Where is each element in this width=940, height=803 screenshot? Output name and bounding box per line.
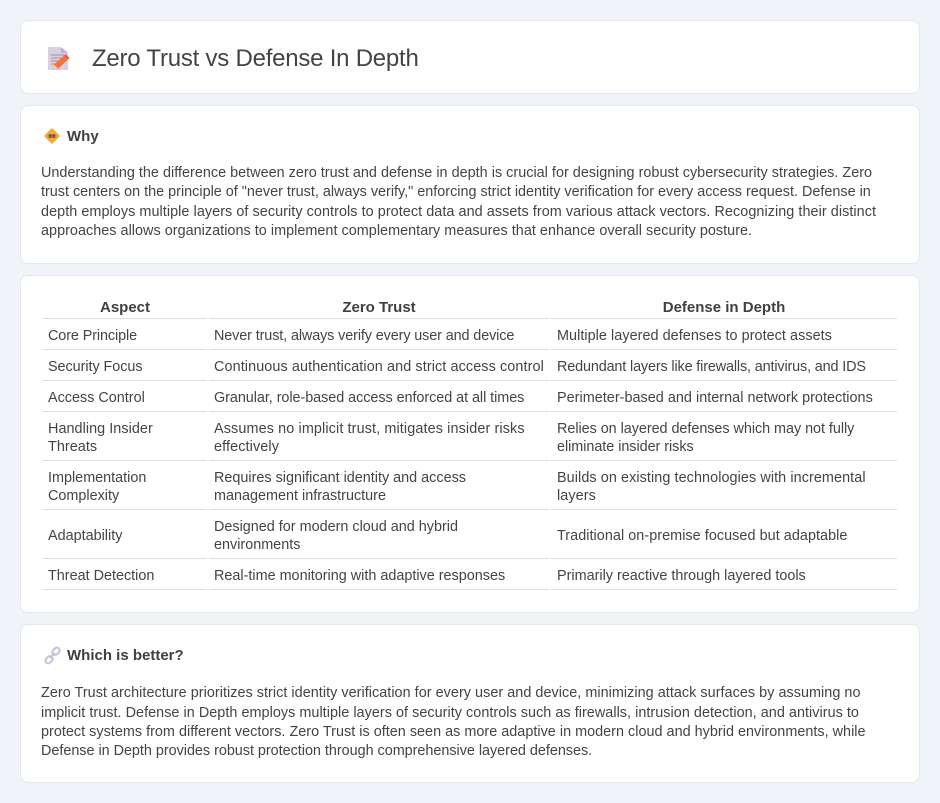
text: why paragraph: Understanding the difference between zero trust and defense in depth is crucial for designing robust cybersecurity strategies. Zero [41, 165, 872, 181]
text: Relies on layered defenses which may not fully [557, 421, 854, 437]
text: which is better paragraph [41, 685, 866, 759]
text: Requires significant identity and access [214, 470, 466, 486]
row: implementation complexity: Implementation [48, 470, 146, 486]
row: handling insider threats: Handling Insider [48, 421, 153, 437]
row: core principle: Core Principle [48, 328, 137, 344]
text: management infrastructure [214, 488, 386, 504]
text: Granular, role-based access enforced at all times [214, 390, 524, 406]
title: Zero Trust vs Defense In Depth [92, 45, 419, 72]
row: implementation complexity: Complexity [48, 488, 119, 504]
text: Continuous authentication and strict access control [214, 359, 544, 375]
heading: why: Why [67, 128, 99, 145]
text: which is better paragraph: Zero Trust architecture prioritizes strict identity verification for every user and device, minimizing attack surfaces by assuming no [41, 685, 861, 701]
row: access control: Access Control [48, 390, 145, 406]
text: which is better paragraph: Defense in Depth provides robust protection through comprehensive layered defenses. [41, 743, 592, 759]
text: Primarily reactive through layered tools [557, 568, 806, 584]
panel: why [20, 105, 920, 264]
table header: zero trust: Zero Trust [342, 299, 416, 316]
row: threat detection: Threat Detection [48, 568, 154, 584]
text: Builds on existing technologies with incremental [557, 470, 866, 486]
icon: warning diamond [44, 128, 60, 144]
row: implementation complexity [48, 470, 146, 504]
text: why paragraph [41, 165, 876, 239]
row: handling insider threats [48, 421, 153, 455]
text: layers [557, 488, 596, 504]
row: handling insider threats: Threats [48, 439, 97, 455]
text: Real-time monitoring with adaptive responses [214, 568, 505, 584]
icon: memo and pencil [48, 47, 70, 70]
text: why paragraph: approaches allows organizations to implement complementary measures that enhance overall security posture. [41, 223, 752, 239]
text: effectively [214, 439, 279, 455]
panel: which is better [20, 624, 920, 783]
heading: which is better: Which is better? [67, 647, 184, 664]
text: why paragraph: trust centers on the principle of "never trust, always verify," enforcing strict identity verification for every access request. Defense in [41, 184, 871, 200]
panel: comparison table [20, 275, 920, 613]
text: Traditional on-premise focused but adaptable [557, 528, 847, 544]
text: eliminate insider risks [557, 439, 694, 455]
row: adaptability: Adaptability [48, 528, 122, 544]
text: Assumes no implicit trust, mitigates insider risks [214, 421, 525, 437]
text: Redundant layers like firewalls, antivirus, and IDS [557, 359, 866, 375]
table header: defense in depth: Defense in Depth [663, 299, 785, 316]
text: which is better paragraph: protect systems from different vectors. Zero Trust is often seen as more adaptive in modern cloud and hybrid environments, while [41, 724, 866, 740]
row: security focus: Security Focus [48, 359, 142, 375]
panel: title header [20, 20, 920, 94]
text: Multiple layered defenses to protect assets [557, 328, 832, 344]
icon: chain link [44, 646, 61, 664]
text: which is better paragraph: implicit trust. Defense in Depth employs multiple layers of security controls such as firewalls, intrusion detection, and antivirus to [41, 705, 859, 721]
text: Designed for modern cloud and hybrid [214, 519, 458, 535]
text: environments [214, 537, 300, 553]
text: Never trust, always verify every user and device [214, 328, 514, 344]
table header: aspect: Aspect [100, 299, 150, 316]
text: why paragraph: depth employs multiple layers of security controls to protect data and assets from various attack vectors. Recognizing their distinct [41, 204, 876, 220]
text: Perimeter-based and internal network protections [557, 390, 873, 406]
